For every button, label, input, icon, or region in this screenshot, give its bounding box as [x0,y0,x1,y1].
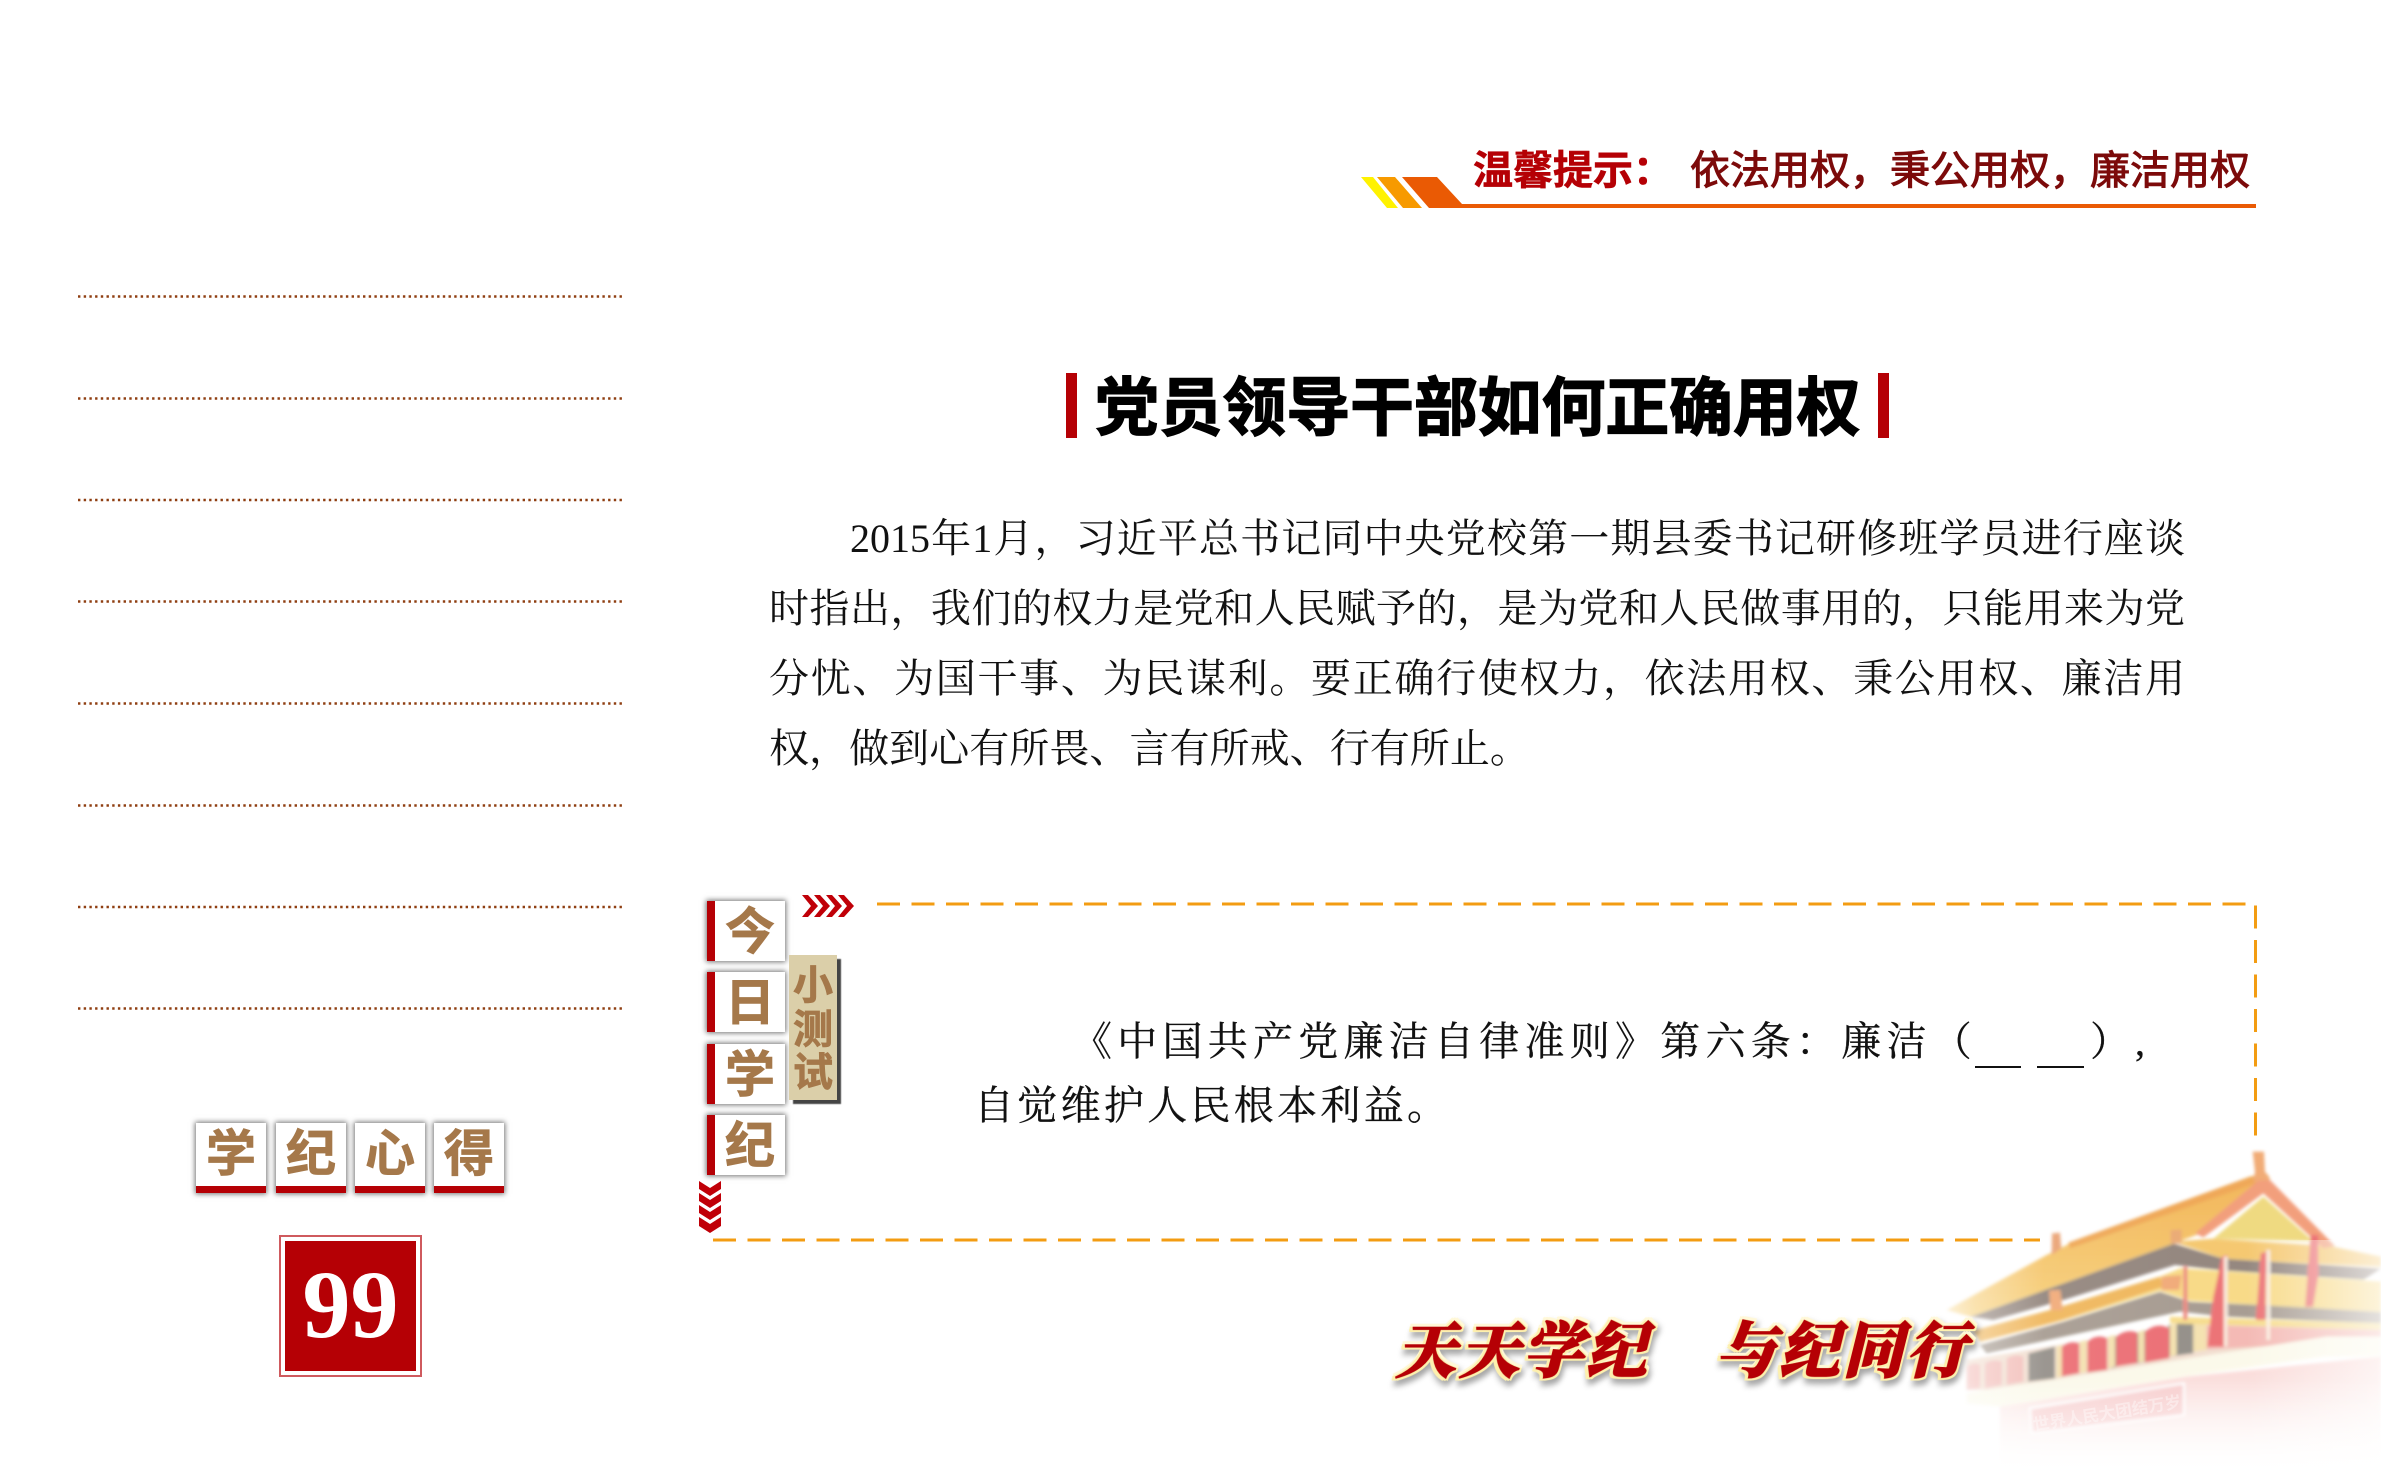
tiles: study notes heading: 心 [365,1126,415,1182]
quiz question text: ）, [2090,1019,2150,1064]
page number badge: 99 [302,1251,398,1358]
quiz question text: 《中国共产党廉洁自律准则》第六条：廉洁（ [1072,1019,1977,1064]
slogan [1390,1316,1983,1390]
upper roof shadow [1970,1243,2381,1320]
icon: down chevrons [699,1181,721,1233]
quiz question text: 自觉维护人民根本利益。 [974,1083,1450,1128]
tiles: today's study vertical heading [702,896,790,1180]
body paragraph: 2015年1月，习近平总书记同中央党校第一期县委书记研修班学员进行座谈 [850,516,2185,561]
body paragraph [769,516,2185,771]
page number badge [279,1235,422,1377]
tiles: study notes heading [191,1118,509,1198]
icon: right chevrons [802,895,854,917]
tag: mini quiz: 测 [793,1008,833,1052]
quiz panel dashed frame [713,902,2257,1242]
ridge finials [2253,1152,2270,1182]
gable [2213,1197,2313,1241]
body paragraph: 分忧、为国干事、为民谋利。要正确行使权力，依法用权、秉公用权、廉洁用 [769,656,2185,701]
right eave [2173,1239,2381,1267]
tag: mini quiz: 试 [793,1051,833,1095]
illustration: Tiananmen gate tower [1948,1149,2381,1435]
tag: mini quiz: 小 [793,964,833,1008]
upper roof left slope [1947,1173,2267,1317]
icon: slanted stripes and underline [1361,177,2256,208]
lower roof [1973,1268,2381,1342]
body paragraph: 时指出，我们的权力是党和人民赋予的，是为党和人民做事用的，只能用来为党 [769,586,2185,631]
tiles: study notes heading: 得 [444,1126,494,1182]
header: warm reminder banner [1361,149,2256,208]
tiles: study notes heading: 学 [206,1126,256,1182]
colonnade back [1967,1318,2381,1390]
title: 党员领导干部如何正确用权 [1095,372,1861,444]
white terrace [1967,1337,2381,1407]
wall [2000,1357,2381,1474]
sign text: 世界人民大团结万岁 [2032,1392,2183,1435]
poles [2207,1255,2227,1347]
lower roof dark band [1980,1292,2381,1353]
slogan: study discipline daily: 天天学纪 [1392,1319,1663,1385]
tiles: today's study vertical heading: 日 [725,975,775,1031]
text: reminder content: 依法用权，秉公用权，廉洁用权 [1690,149,2250,193]
notes panel: dotted writing lines [78,295,622,1010]
tiles: today's study vertical heading: 学 [725,1047,775,1103]
tiles: today's study vertical heading: 纪 [725,1118,775,1174]
body paragraph: 权，做到心有所畏、言有所戒、行有所止。 [769,726,1530,771]
label: reminder: 温馨提示： [1473,149,1673,193]
tiles: today's study vertical heading: 今 [725,904,775,960]
sign board [2030,1383,2184,1433]
quiz question text [974,1019,2150,1128]
tag: mini quiz [789,955,837,1100]
slogan: walk with discipline: 与纪同行 [1712,1319,1983,1385]
tiles: study notes heading: 纪 [286,1126,336,1182]
